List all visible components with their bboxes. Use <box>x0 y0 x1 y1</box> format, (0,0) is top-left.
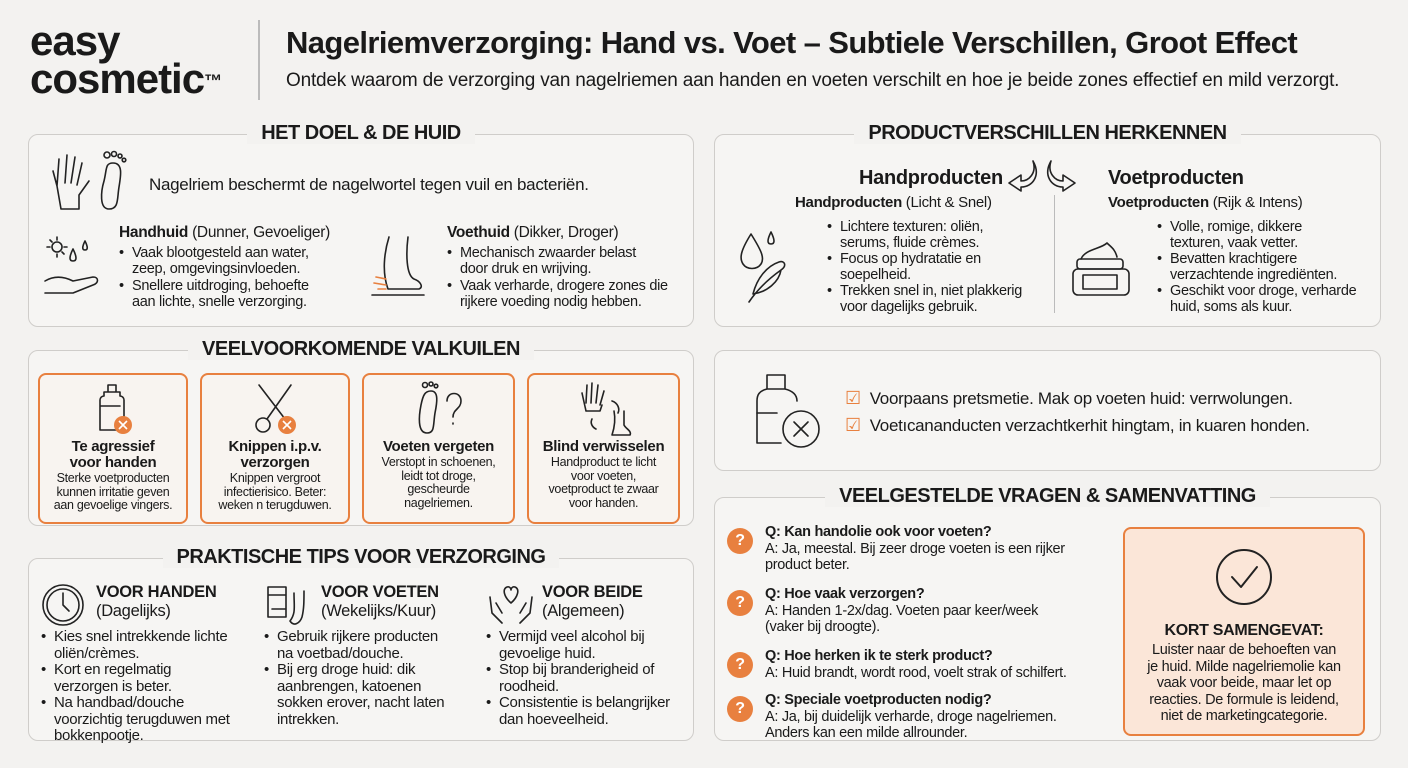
panel: productverschillen: voor dagelijks gebruik. <box>840 299 977 315</box>
heading: voetproducten: Voetproducten <box>1108 167 1244 189</box>
faq list: Q: Hoe herken ik te sterk product? <box>765 648 992 664</box>
card: te agressief <box>38 373 188 524</box>
panel: checklist <box>714 350 1381 471</box>
card: knippen: verzorgen <box>240 454 310 471</box>
card: voeten vergeten: Voeten vergeten <box>383 438 494 455</box>
faq list <box>727 524 1067 741</box>
tip: handen <box>42 583 230 744</box>
faq list: A: Handen 1-2x/dag. Voeten paar keer/week <box>765 602 1038 618</box>
card: te agressief: Te agressief <box>72 438 154 455</box>
panel: praktische tips: gevoelige huid. <box>499 644 595 662</box>
card: blind verwisselen <box>527 373 680 524</box>
text: voethuid: door druk en wrijving. <box>460 261 591 277</box>
icon: drops and feather <box>740 231 786 303</box>
card: blind verwisselen: voetproduct te zwaar <box>548 482 659 496</box>
text: PRAKTISCHE TIPS VOOR VERZORGING <box>176 546 545 568</box>
faq list: Q: Speciale voetproducten nodig? <box>765 692 991 708</box>
text: voethuid: Voethuid (Dikker, Droger) <box>447 224 618 241</box>
logo <box>30 17 221 102</box>
panel: productverschillen: Lichtere texturen: oliën, <box>840 219 983 235</box>
faq list: ? <box>735 594 745 611</box>
text: handhuid: Handhuid (Dunner, Gevoeliger) <box>119 224 330 241</box>
text: VEELGESTELDE VRAGEN & SAMENVATTING <box>839 485 1256 507</box>
panel: praktische tips: bokkenpootje. <box>54 727 144 744</box>
panel: productverschillen: Geschikt voor droge, verharde <box>1170 283 1356 299</box>
summary box: reacties. De formule is leidend, <box>1149 692 1339 708</box>
text: voethuid: Mechanisch zwaarder belast <box>460 244 636 260</box>
icon: hand and foot <box>52 150 127 210</box>
panel: productverschillen: Volle, romige, dikkere <box>1170 219 1302 235</box>
panel: faq <box>714 497 1381 741</box>
text: handhuid: zeep, omgevingsinvloeden. <box>132 261 300 277</box>
icon: clock <box>42 584 84 626</box>
summary box: Luister naar de behoeften van <box>1152 642 1336 658</box>
panel: praktische tips: Vermijd veel alcohol bij <box>499 628 644 645</box>
card: te agressief: aan gevoelige vingers. <box>54 498 172 512</box>
summary box: je huid. Milde nagelriemolie kan <box>1147 658 1341 674</box>
faq list: (vaker bij droogte). <box>765 619 880 635</box>
faq list: A: Ja, bij duidelijk verharde, droge nagelriemen. <box>765 708 1057 724</box>
text: voethuid <box>447 224 668 310</box>
faq list: Q: Kan handolie ook voor voeten? <box>765 524 991 540</box>
faq list: Q: Hoe vaak verzorgen? <box>765 586 924 602</box>
panel: productverschillen: texturen, vaak vetter. <box>1170 235 1298 251</box>
card: blind verwisselen: Handproduct te licht <box>551 455 656 469</box>
faq list: product beter. <box>765 557 849 573</box>
text: PRODUCTVERSCHILLEN HERKENNEN <box>868 122 1227 144</box>
panel: praktische tips: VOOR BEIDE <box>542 583 643 601</box>
faq list: A: Huid brandt, wordt rood, voelt strak of schilfert. <box>765 664 1067 680</box>
card: voeten vergeten: Verstopt in schoenen, <box>382 455 495 469</box>
checklist items: ☑ Voetıcananducten verzachtkerhit hingtam, in kuaren honden. <box>845 415 1310 435</box>
panel: productverschillen: huid, soms als kuur. <box>1170 299 1292 315</box>
text: HET DOEL & DE HUID <box>261 122 461 144</box>
checklist items <box>845 388 1310 435</box>
panel: praktische tips: (Wekelijks/Kuur) <box>321 602 436 620</box>
summary box: KORT SAMENGEVAT: <box>1164 622 1324 639</box>
icon: hand sun water <box>44 236 98 294</box>
card: te agressief: voor handen <box>70 454 156 471</box>
panel: praktische tips: sokken erover, nacht laten <box>277 694 444 711</box>
panel: productverschillen: soepelheid. <box>840 267 911 283</box>
panel: praktische tips: verzorgen is beter. <box>54 678 172 694</box>
icon: cream jar <box>1072 242 1130 296</box>
panel: praktische tips: voorzichtig terugduwen met <box>54 710 230 728</box>
panel: praktische tips: roodheid. <box>499 678 559 694</box>
card: te agressief: Sterke voetproducten <box>57 471 169 485</box>
panel: praktische tips: VOOR VOETEN <box>321 583 439 601</box>
faq list: Anders kan een milde allrounder. <box>765 725 967 741</box>
faq list: ? <box>735 700 745 717</box>
logo: easy <box>30 17 119 64</box>
panel: praktische tips: (Dagelijks) <box>96 602 171 620</box>
card: knippen <box>200 373 350 524</box>
card: knippen: Knippen vergroot <box>230 471 320 485</box>
faq list: ? <box>735 656 745 673</box>
text: handhuid <box>119 224 330 310</box>
text: voetproducten: Voetproducten (Rijk & Intens) <box>1108 194 1302 211</box>
icon: towel foot <box>267 586 305 625</box>
panel: productverschillen <box>714 134 1381 327</box>
card: blind verwisselen: voor voeten, <box>571 468 636 482</box>
text: handproducten: Handproducten (Licht & Snel) <box>795 194 992 211</box>
panel: praktische tips: (Algemeen) <box>542 602 624 620</box>
panel: praktische tips: Gebruik rijkere producten <box>277 628 438 645</box>
text: handhuid: Snellere uitdroging, behoefte <box>132 278 309 294</box>
text: handhuid: aan lichte, snelle verzorging. <box>132 294 307 310</box>
panel: productverschillen: serums, fluide crèmes. <box>840 235 979 251</box>
text: purpose: Nagelriem beschermt de nagelwortel tegen vuil en bacteriën. <box>149 175 589 194</box>
card: blind verwisselen: Blind verwisselen <box>543 438 664 455</box>
panel: praktische tips: Consistentie is belangrijker <box>499 694 670 711</box>
panel: praktische tips <box>28 558 694 741</box>
panel: praktische tips: dan hoeveelheid. <box>499 710 608 728</box>
card: knippen: Knippen i.p.v. <box>228 438 322 455</box>
summary box: niet de marketingcategorie. <box>1161 708 1327 724</box>
text: VEELVOORKOMENDE VALKUILEN <box>202 338 520 360</box>
panel: praktische tips: Bij erg droge huid: dik <box>277 661 415 678</box>
panel: het doel & de huid <box>28 134 694 327</box>
panel: praktische tips: VOOR HANDEN <box>96 583 216 601</box>
subtitle: Ontdek waarom de verzorging van nagelriemen aan handen en voeten verschilt en hoe je beide zones effectief en mild verzorgt. <box>286 70 1339 91</box>
panel: praktische tips: Kies snel intrekkende lichte <box>54 628 227 645</box>
icon: bottle with x <box>756 374 820 448</box>
panel: productverschillen: Focus op hydratatie en <box>840 251 981 267</box>
summary box <box>1123 527 1365 736</box>
tip: beide <box>486 583 670 728</box>
faq list: A: Ja, meestal. Bij zeer droge voeten is een rijker <box>765 540 1065 556</box>
card: voeten vergeten <box>362 373 515 524</box>
panel: praktische tips: Kort en regelmatig <box>54 661 171 678</box>
panel: praktische tips: Stop bij branderigheid of <box>499 661 654 678</box>
panel: praktische tips: oliën/crèmes. <box>54 644 139 662</box>
panel: productverschillen: Bevatten krachtigere <box>1170 251 1297 267</box>
card: voeten vergeten: nagelriemen. <box>404 496 473 510</box>
card: blind verwisselen: voor handen. <box>569 496 638 510</box>
panel: praktische tips: Na handbad/douche <box>54 694 184 711</box>
faq list: ? <box>735 532 745 549</box>
panel: productverschillen: verzachtende ingrediënten. <box>1170 267 1337 283</box>
icon: hands heart <box>489 586 533 624</box>
tip: voeten <box>264 583 444 728</box>
icon: swap arrows <box>1008 160 1076 192</box>
heading: handproducten: Handproducten <box>859 167 1003 189</box>
icon: check circle <box>1216 549 1272 605</box>
checklist items: ☑ Voorpaans pretsmetie. Mak op voeten huid: verrwolungen. <box>845 388 1293 408</box>
panel: productverschillen: Trekken snel in, niet plakkerig <box>840 283 1022 299</box>
text: voethuid: rijkere voeding nodig hebben. <box>460 294 642 310</box>
panel: praktische tips: aanbrengen, katoenen <box>277 678 421 694</box>
card: voeten vergeten: leidt tot droge, <box>401 468 476 482</box>
text: voethuid: Vaak verharde, drogere zones die <box>460 278 668 294</box>
panel: praktische tips: na voetbad/douche. <box>277 644 403 662</box>
icon: foot pressure <box>371 236 425 296</box>
title: Nagelriemverzorging: Hand vs. Voet – Subtiele Verschillen, Groot Effect <box>286 25 1297 60</box>
text: handhuid: Vaak blootgesteld aan water, <box>132 244 309 260</box>
summary box: vaak voor beide, maar let op <box>1157 675 1331 691</box>
card: knippen: infectierisico. Beter: <box>224 484 326 498</box>
card: te agressief: kunnen irritatie geven <box>57 484 169 498</box>
card: knippen: weken n terugduwen. <box>218 498 332 512</box>
logo: cosmetic™ <box>30 55 221 102</box>
panel: valkuilen <box>28 350 694 526</box>
card: voeten vergeten: gescheurde <box>407 482 470 496</box>
panel: praktische tips: intrekken. <box>277 710 339 728</box>
